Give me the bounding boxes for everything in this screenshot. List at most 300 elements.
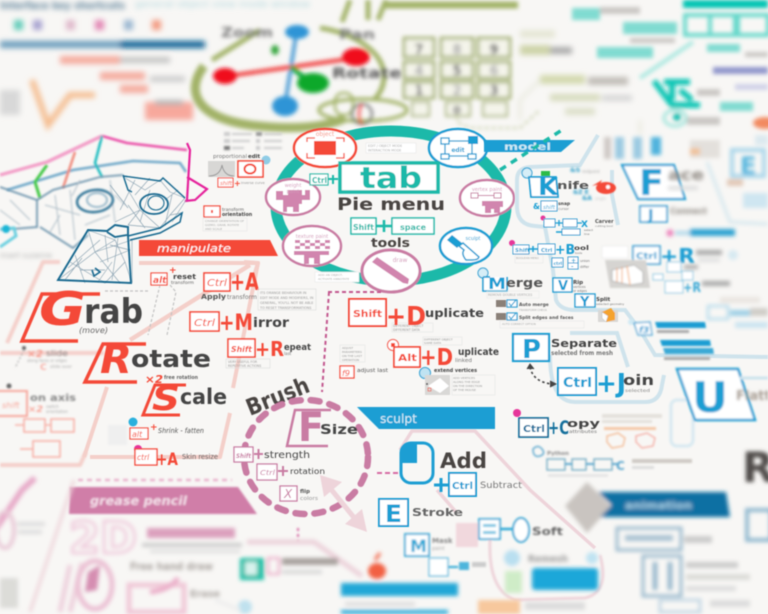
alt reset transform: alt (153, 276, 167, 286)
tools label: tools (371, 236, 410, 250)
shift space keys: space (400, 223, 427, 232)
note: apply transform: TO RESET TRANSFORMATIONS (259, 306, 311, 310)
carver: Carver (595, 219, 614, 225)
shift space keys: Shift (353, 223, 374, 232)
panel: grease pencil far blur (0, 478, 458, 614)
blue ampersand shortcuts: &A (582, 195, 592, 202)
key: Rotate: R (100, 337, 132, 383)
key: Copy: attributes (569, 429, 597, 434)
ctrl plus minus: union (580, 259, 590, 263)
banner: manipulate (139, 240, 278, 256)
mask key (405, 534, 453, 557)
panel: python row: C (616, 459, 625, 473)
line row: line (584, 232, 590, 236)
panel: numpad: 4 (414, 64, 424, 79)
ctrl R loop cut: Ctrl (636, 252, 657, 262)
Add label: Add (440, 449, 487, 473)
shift R repeat (226, 337, 311, 368)
key: Merge (478, 268, 543, 298)
key: E stroke: E (385, 500, 402, 528)
coloured seams (0, 136, 187, 198)
ctrl M mirror: +M (219, 311, 253, 336)
copy notes (602, 414, 662, 448)
key: E stroke (379, 499, 463, 528)
key: Grab: rab (84, 292, 143, 332)
auto merge options: AUTO CORRECT OPTION (502, 322, 536, 326)
and shift snap: & (533, 202, 540, 211)
far blue keys (708, 250, 768, 328)
key: Copy: +C (548, 417, 569, 439)
alt shrink fatten: alt (132, 430, 143, 439)
dotted path from top (322, 292, 384, 392)
panel: model right side blurred (602, 163, 714, 448)
loop cut labels (684, 250, 730, 286)
bool (509, 240, 589, 263)
blue bars (238, 583, 458, 614)
panel: interface shortcuts top left (0, 0, 310, 125)
note: draw: ADD AN OBJECT, (318, 273, 343, 277)
bool: tools (575, 251, 583, 255)
draw mode: draw (393, 257, 408, 264)
carver: X (581, 220, 588, 230)
blue ampersand shortcuts: midpoint (582, 169, 600, 174)
teal ring (276, 131, 506, 281)
orange cube (598, 308, 618, 322)
ctrl A apply transform: Apply (201, 293, 226, 301)
note beside cube (602, 246, 628, 258)
key: Shift D duplicate: uplicate (425, 306, 484, 320)
plus ctrl subtract (434, 473, 523, 496)
panel: numpad: 8 (452, 43, 462, 58)
key: Rip: V (558, 279, 568, 294)
panel: model tools background blocks (604, 135, 768, 224)
auto merge options (496, 300, 584, 328)
object mode (294, 129, 356, 167)
extend vertices: OF THE MOUSE (453, 388, 476, 392)
zoom pan rotate labels: Pan (339, 28, 375, 43)
and shift snap (533, 201, 571, 211)
key: Join: +J (596, 369, 626, 399)
banner: sculpt: sculpt (380, 412, 417, 426)
panel: sculpt lower tools (405, 518, 603, 600)
and shift snap: shift (543, 205, 556, 211)
shift R repeat: +R (255, 337, 284, 361)
blue ampersand shortcuts: &Z E (573, 189, 589, 196)
x flip colors: flip (300, 489, 310, 495)
extend vertices: extend vertices (434, 368, 477, 374)
hot pink ear chevron (185, 143, 207, 201)
panel: animation (565, 443, 768, 612)
pencil stroke (30, 480, 74, 612)
mask key: Mask (432, 537, 453, 545)
mouse orbit icon (319, 93, 407, 124)
key: Knife (522, 168, 589, 201)
key: F size: Size (320, 422, 358, 438)
banner: animation: animation (625, 499, 692, 512)
panel: model tools background blocks: E (740, 152, 756, 180)
extend vertices: ADD VERTICES (453, 376, 475, 380)
line row: select (584, 228, 594, 232)
key: Grab: G (39, 282, 86, 336)
banner: manipulate: manipulate (157, 243, 231, 255)
key: Grab (22, 282, 143, 341)
axis lines (228, 35, 355, 105)
sharp mesh lines (58, 178, 186, 283)
bool: ool (574, 244, 589, 252)
first key text (625, 535, 712, 543)
ctrl A skin resize: +A (156, 450, 179, 470)
panel: proportional edit: inverse curve (241, 181, 265, 185)
ctrl tab (310, 174, 338, 185)
vertex paint (460, 180, 514, 216)
banner: animation (598, 492, 730, 517)
blender logo (592, 180, 616, 194)
dashed brush ring (244, 400, 368, 514)
key: Grab: (move) (79, 326, 108, 335)
ctrl M mirror: Ctrl (194, 318, 215, 329)
x2 free rotation: ×2 (145, 373, 163, 386)
pale band (215, 600, 240, 610)
key: Separate: P (522, 335, 541, 365)
panel: numpad: 9 (489, 43, 499, 58)
key description (282, 558, 338, 574)
panel: proportional edit: shift (220, 181, 233, 187)
note: adjust parameters: ON THE LAST (342, 354, 362, 358)
draw mode (362, 250, 420, 292)
soft key: Soft (532, 525, 563, 538)
note: apply transform: ITS ORANGE BEHAVIOUR IN (260, 291, 307, 295)
key: Join: oin (623, 373, 654, 389)
double arrow (320, 475, 367, 532)
key: Copy: Ctrl (523, 424, 545, 435)
animation keys (617, 528, 681, 596)
on axis: on axis (30, 393, 76, 404)
banner: model: model (504, 142, 551, 153)
panel: top right of model far blur (666, 166, 768, 328)
ctrl A skin resize: ctrl (137, 453, 150, 462)
x flip colors: colors (300, 496, 318, 502)
key: Separate (513, 334, 617, 365)
panel: proportional edit (208, 132, 282, 188)
key: Split (575, 294, 624, 310)
alt shrink fatten: Shrink - fatten (158, 427, 204, 435)
note: different data: DIFFERENT OBJECT (393, 324, 424, 328)
key: F size: F (298, 405, 324, 451)
texture paint (283, 226, 341, 266)
key: Join: selected (625, 388, 651, 393)
shift strength: Shift (236, 452, 252, 460)
key: Split: Split (596, 297, 611, 303)
ctrl A apply transform: +A (230, 268, 259, 296)
ctrl tab: Ctrl (312, 176, 327, 185)
extend vertices: ON THE DIRECTION (453, 384, 482, 388)
ctrl A apply transform: transform (227, 294, 257, 301)
key: Merge: erge (506, 276, 543, 290)
D key large (60, 561, 112, 612)
note: apply transform: GENERAL, YOU'LL NOT BE ABLE (260, 301, 313, 305)
key: Face (622, 163, 685, 204)
shift R repeat: REPETITIVE ACTIONS (228, 364, 261, 368)
bevel key: +R (683, 281, 701, 296)
panel: transform orientation (203, 206, 253, 231)
pink path to blender (247, 542, 362, 576)
ctrl M mirror (190, 311, 290, 336)
alt reset transform: reset (173, 273, 197, 281)
panel: notes centre (340, 299, 499, 395)
panel: numpad: 3 (489, 84, 499, 99)
note: draw: ACTIVATE ANNOTATE (318, 277, 349, 281)
banner: model (484, 140, 575, 153)
panel: model banner and connectors (484, 128, 768, 402)
key: Separate: selected from mesh (551, 350, 613, 357)
key: Rip: or edges (573, 289, 587, 293)
key: Scale: cale (180, 385, 227, 409)
panel: proportional edit: edit (248, 154, 261, 160)
key: Join (558, 368, 654, 399)
key: Face: F (639, 163, 664, 204)
and shift snap: snap (558, 202, 571, 207)
on axis: ×2 (28, 405, 43, 415)
zoom pan rotate labels (221, 26, 402, 82)
ctrl plus minus (552, 257, 590, 270)
link from brush to add (377, 472, 399, 474)
big cube (605, 260, 650, 288)
axis handles (213, 25, 370, 116)
vertex paint: vertex paint (472, 187, 502, 193)
panel: python row: Python (547, 451, 569, 457)
teal key (240, 558, 264, 580)
key: Merge: REMOVE DOUBLE VERTICES (488, 293, 532, 297)
small keys (653, 262, 693, 293)
teal dashes (500, 128, 565, 170)
bool: +B (555, 243, 575, 258)
shift strength (234, 447, 310, 462)
x2 slide (15, 346, 72, 373)
ctrl A skin resize (134, 445, 218, 470)
panel: numpad: 5 (452, 64, 462, 79)
mask key: M (410, 537, 427, 557)
ctrl A apply transform (201, 268, 259, 301)
key: Copy (513, 409, 600, 439)
f3 key (628, 319, 652, 336)
panel: proportional edit: proportional (213, 154, 247, 160)
extend vertices: ALONG THE EDGE (453, 380, 480, 384)
mask key: paint (432, 546, 445, 552)
note: apply transform: EDIT MODE AND MODIFIERS, IN (260, 296, 314, 300)
key: Split: Y (579, 295, 590, 310)
carver (540, 216, 614, 230)
head outline and eye (58, 175, 185, 283)
key: Scale (143, 379, 227, 419)
ctrl R loop cut: +R (660, 244, 695, 268)
weight paint: paint (287, 189, 299, 195)
on axis: switch (46, 404, 59, 409)
shift R repeat: last (284, 351, 292, 356)
soft pink tile (456, 523, 478, 547)
note: mode: INTERACTION MODE (368, 148, 401, 152)
key: U flatten: U (692, 373, 728, 422)
panel: sculpt connector (400, 431, 595, 548)
panel: numpad (404, 38, 540, 128)
object mode: object (316, 131, 335, 138)
note: same data: DIFFERENT OBJECT (424, 338, 453, 342)
key: Shift D duplicate (349, 299, 484, 332)
panel: python row (533, 446, 692, 477)
texture paint: texture paint (296, 234, 328, 240)
alt shrink fatten: + (150, 423, 158, 433)
bool: Ctrl (541, 248, 552, 254)
zoom pan rotate labels: Rotate (332, 66, 402, 82)
panel: grab and axis options left (0, 346, 127, 457)
panel: pie menu (266, 129, 514, 292)
x2 slide: C (40, 363, 47, 373)
auto merge options: TRANSFORM CHECK (518, 308, 547, 312)
blue ampersand shortcuts: angle (595, 196, 607, 201)
panel: teal shortcuts top right (572, 0, 768, 129)
auto merge options: Auto merge (519, 302, 549, 308)
key: Alt D duplicate: +D (420, 345, 453, 371)
E key large (129, 578, 184, 612)
ctrl A apply transform: Ctrl (207, 278, 227, 289)
alt reset transform (151, 266, 197, 286)
sculpt mode: sculpt (465, 236, 481, 242)
x2 free rotation (145, 373, 198, 386)
panel: transform orientation: AND SCALE (205, 227, 222, 231)
shift strength: strength (264, 450, 310, 461)
banner: grease pencil (69, 487, 257, 514)
auto merge options: Split edges and faces (519, 315, 574, 321)
note: mode (366, 143, 416, 153)
alt reset transform: transform (171, 280, 194, 286)
x flip colors (280, 486, 318, 502)
free hand draw label: Free hand draw (130, 560, 213, 573)
panel: sculpt (357, 407, 523, 528)
panel: numpad: 2 (452, 84, 462, 99)
ctrl M mirror: irror (253, 316, 290, 331)
key: Shift D duplicate: +D (386, 302, 426, 332)
key: Copy: opy (567, 417, 600, 430)
far right blue key (747, 510, 768, 540)
panel: knife group (478, 166, 654, 439)
panel: bottom centre remesh: Remesh (528, 554, 568, 565)
blurred left side of the head (0, 175, 125, 248)
plus ctrl subtract: Subtract (480, 481, 523, 491)
panel: brush (234, 292, 384, 532)
key: Merge: M (488, 274, 506, 293)
note: adjust parameters (340, 345, 365, 362)
blender logo red (368, 553, 386, 579)
key: Split: selected geometry (596, 302, 624, 306)
panel: interface shortcuts top left: general object view mode window (135, 0, 310, 10)
pink key (268, 558, 279, 574)
soft key (479, 518, 563, 542)
key: Alt D duplicate (388, 340, 499, 371)
banner: sculpt (357, 407, 495, 429)
key: F size (287, 405, 358, 451)
second key text (686, 562, 750, 591)
key: Rotate: otate (131, 345, 211, 373)
key: f9 adjust last (340, 366, 389, 378)
x2 slide: along faces or edges (27, 358, 67, 363)
note: adjust parameters: OPERATION (342, 358, 359, 362)
on axis (0, 384, 76, 416)
key: Scale: S (152, 379, 180, 419)
ctrl rotation: rotation (290, 467, 325, 476)
tab key: tab (360, 161, 422, 195)
f3 key: f3 (639, 326, 649, 336)
connect label: Connect (670, 207, 708, 217)
pink dotted line (78, 479, 232, 481)
plus ctrl subtract: Ctrl (452, 481, 473, 492)
bool: Shift (515, 248, 530, 254)
olive navigation ring (195, 0, 518, 128)
key: Alt D duplicate: Alt (398, 353, 417, 364)
panel: proportional edit: + (234, 179, 241, 188)
erase label: Erase (190, 589, 220, 600)
lock axis keys (15, 419, 74, 457)
panel: transform orientation: CHANGE ORIENTATION OF (205, 219, 244, 223)
key: Rotate (85, 337, 211, 383)
key: f9 adjust last: adjust last (357, 368, 389, 374)
ctrl plus minus: - (571, 264, 574, 270)
ctrl rotation: Ctrl (260, 469, 275, 477)
note: adjust parameters: PARAMETERS (342, 350, 362, 354)
alt key (429, 558, 486, 576)
key: Knife: nife (557, 179, 589, 192)
panel: numpad: 1 (414, 84, 424, 99)
far right key (720, 297, 760, 303)
heading: Pie menu: Pie menu (337, 195, 445, 215)
key: Rip: vertices (573, 285, 586, 289)
note: different data (392, 323, 433, 332)
extend vertices (420, 368, 495, 395)
shift R repeat: VERY USEFUL FOR (228, 360, 258, 364)
bottom right keys (660, 600, 750, 612)
diamond (565, 482, 611, 533)
edit mode (429, 129, 487, 167)
blue ampersand shortcuts: &S (570, 166, 581, 174)
key: Separate: Separate (551, 337, 617, 350)
diagram: Suzanne mesh (0, 136, 207, 283)
key: f9 adjust last: f9 (342, 369, 350, 378)
key: Shift D duplicate: Shift (353, 309, 382, 320)
panel: bottom centre remesh (478, 550, 598, 614)
ctrl plus minus: ctrl (554, 261, 563, 267)
on axis: orientation (46, 409, 68, 414)
arrow: separate to join (527, 364, 556, 387)
blue ampersand shortcuts (570, 166, 607, 202)
alt reset transform: + (169, 266, 177, 276)
note: same data (423, 337, 462, 345)
search menu bars (655, 322, 714, 360)
panel: numpad: 6 (489, 64, 499, 79)
light blue tool channel (517, 135, 768, 357)
ctrl plus minus: + (571, 258, 576, 264)
2D label: 2D (69, 513, 137, 564)
heading: Brush: Brush (243, 373, 313, 422)
key: U flatten (671, 369, 768, 446)
key: Rip: Rip (573, 280, 583, 286)
panel: transform orientation: orientation (222, 212, 253, 218)
note: mode: EDIT / OBJECT MODE (368, 144, 402, 148)
ctrl A skin resize: Skin resize (182, 453, 218, 461)
panel: olive view shortcuts (520, 30, 640, 135)
shift space keys (351, 218, 434, 234)
panel: transform orientation: GIZMO, GRAB, ROTATE (205, 223, 239, 227)
x2 slide: slide (46, 349, 68, 358)
sculpt mode (440, 228, 492, 264)
note: apply transform (258, 289, 316, 310)
